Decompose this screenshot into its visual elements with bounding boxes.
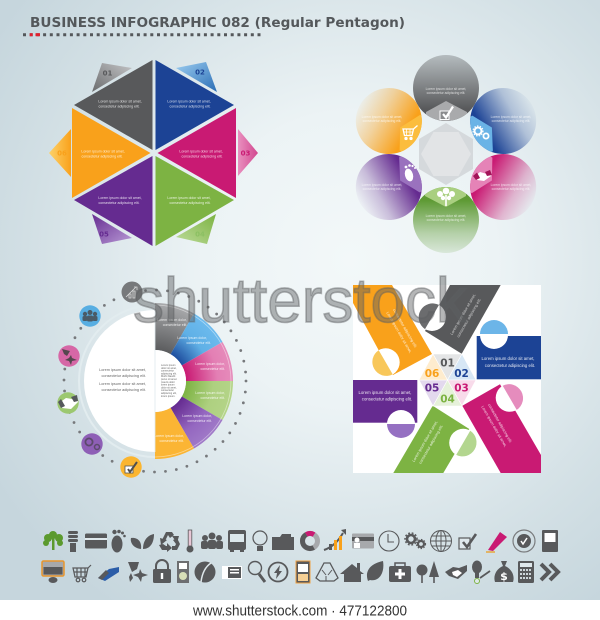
- triangle: green: [156, 156, 234, 246]
- triangle: magenta: consectetur adipiscing elit.: [181, 154, 223, 158]
- donut inner white: mauris dolor: [161, 381, 175, 384]
- segment: purple: Lorem ipsum dolor,: [182, 414, 212, 418]
- card: gray: [418, 285, 501, 354]
- dotted orbit: [64, 290, 246, 472]
- circle: green: [413, 181, 479, 253]
- card: green: consectetur adipiscing elit.: [418, 424, 444, 465]
- icon: magnifier: [248, 562, 265, 582]
- icon: growth chart: [324, 529, 346, 550]
- icon: road: [194, 562, 216, 582]
- tab 01: 01: [103, 70, 112, 78]
- circle captions: Lorem ipsum dolor sit amet,: [362, 183, 402, 187]
- card: green: [393, 406, 477, 473]
- icon: donut chart: [302, 533, 318, 548]
- triangle: green: consectetur adipiscing elit.: [169, 201, 211, 205]
- title: BUSINESS INFOGRAPHIC 082 (Regular Pentagon): [30, 16, 405, 31]
- icon: check badge: [120, 456, 142, 478]
- tab 05: [92, 214, 132, 244]
- circle captions: consectetur adipiscing elit.: [363, 187, 401, 191]
- icon: gears badge: [81, 433, 103, 455]
- icon: check box: [459, 534, 476, 549]
- circle captions: consectetur adipiscing elit.: [492, 187, 530, 191]
- donut inner white: [155, 310, 186, 452]
- left white half: consectetur adipiscing elit.: [101, 388, 146, 392]
- tab 02: [176, 62, 217, 92]
- panel: pinwheel on white square: [353, 285, 541, 473]
- segment: green: Lorem ipsum dolor,: [195, 391, 225, 395]
- donut inner white: purus sit amet: [161, 378, 177, 381]
- white square: [353, 285, 541, 473]
- center hexagons: [419, 123, 473, 185]
- icon: monitor: [42, 561, 64, 583]
- icon: clock: [379, 531, 399, 551]
- card: magenta: [462, 384, 541, 473]
- triangle: orange: Lorem ipsum dolor sit amet,: [81, 150, 125, 154]
- icon: money bag: [494, 561, 514, 583]
- segment: blue: consectetur elit.: [186, 341, 211, 345]
- segment: blue: Lorem ipsum dolor,: [177, 336, 207, 340]
- icon: trees: [416, 561, 439, 583]
- donut inner white: lorem ipsum: [161, 384, 175, 387]
- circle captions: [362, 87, 531, 222]
- segment: yellow: [154, 408, 194, 459]
- icon: cart: [73, 565, 91, 582]
- left halo ring: [79, 305, 231, 457]
- icon: badge: [513, 530, 535, 552]
- triangle: purple: [74, 156, 152, 246]
- footer text: www.shutterstock.com · 477122800: [192, 604, 407, 620]
- donut inner white: dolor sit amet,: [161, 386, 177, 389]
- segment: gray: Lorem ipsum dolor,: [157, 318, 187, 322]
- card: purple: [353, 380, 417, 438]
- card: purple: consectetur adipiscing elit.: [362, 396, 412, 402]
- icon: world map: [128, 562, 148, 582]
- icon: credit card: [85, 534, 107, 548]
- circle: gray: [413, 55, 479, 127]
- segment: purple: [170, 396, 222, 448]
- right thin highlight ring: [155, 305, 231, 457]
- triangle: orange: [72, 108, 150, 198]
- triangle: purple: consectetur adipiscing elit.: [98, 201, 140, 205]
- segment: magenta: [182, 342, 233, 381]
- donut inner white: adipiscing elit.: [161, 372, 177, 375]
- segment: green: [182, 381, 233, 420]
- donut inner white: Morbi blandit: [161, 375, 176, 378]
- icon: first aid: [389, 563, 411, 582]
- icon: marker: [486, 532, 507, 552]
- panel: six circles around a hexagon: [356, 55, 536, 253]
- watermark: shutterstock: [133, 266, 467, 336]
- left white half: consectetur adipiscing elit.: [101, 374, 146, 378]
- icon: people badge: [79, 305, 101, 327]
- icon: money bag: $: [500, 570, 508, 583]
- tab 02: 02: [195, 68, 205, 76]
- icon: leaves: [131, 534, 154, 549]
- icon: music player: [177, 561, 189, 583]
- icon: chart badge: [122, 282, 142, 302]
- circle captions: Lorem ipsum dolor sit amet,: [491, 115, 531, 119]
- segment: gray: consectetur elit.: [163, 323, 187, 327]
- donut inner white: Lorem ipsum: [161, 364, 175, 367]
- card: green: Lorem ipsum dolor sit amet,: [412, 420, 439, 463]
- icon: gears: [405, 533, 426, 548]
- icon: notebook: [542, 530, 558, 552]
- icon: recycle: [159, 532, 180, 552]
- panel: hexagon of triangles: [49, 60, 258, 246]
- triangle: gray: consectetur adipiscing elit.: [98, 104, 140, 108]
- icon: globe: [430, 530, 452, 552]
- tab 05: 05: [99, 230, 109, 238]
- circle captions: consectetur adipiscing elit.: [427, 218, 465, 222]
- circle captions: Lorem ipsum dolor sit amet,: [426, 87, 466, 91]
- center number hexagon: 04: [440, 394, 455, 406]
- tab 06: 06: [57, 150, 67, 158]
- icon: handshake: [473, 170, 492, 181]
- circle captions: consectetur adipiscing elit.: [492, 119, 530, 123]
- triangle: gray: [74, 60, 152, 150]
- center number hexagon: 01: [440, 358, 455, 370]
- segment: magenta: consectetur elit.: [200, 367, 225, 371]
- icon: cart: [403, 126, 418, 140]
- icon: light bulb: [253, 531, 267, 551]
- icon: handshake badge: [57, 392, 79, 414]
- icon: people: [201, 532, 223, 549]
- segment: blue: [170, 314, 222, 366]
- donut inner white: consectetur: [161, 389, 174, 392]
- card: blue: Lorem ipsum dolor sit amet,: [481, 356, 535, 361]
- icon: footprints: [403, 164, 416, 182]
- center number hexagon: 03: [454, 382, 469, 394]
- circle captions: Lorem ipsum dolor sit amet,: [491, 183, 531, 187]
- circle: blue: [470, 88, 536, 154]
- left white half: [84, 310, 155, 452]
- triangle: purple: Lorem ipsum dolor sit amet,: [98, 196, 142, 200]
- triangle: blue: Lorem ipsum dolor sit amet,: [167, 100, 211, 104]
- triangle: green: Lorem ipsum dolor sit amet,: [167, 196, 211, 200]
- donut inner white: lorem ipsum.: [161, 395, 176, 398]
- circle captions: consectetur adipiscing elit.: [363, 119, 401, 123]
- icon strip row 2: [42, 560, 558, 584]
- icon: bulb and key: [472, 560, 490, 584]
- circle: magenta: [470, 154, 536, 220]
- icon: tree: [43, 531, 63, 550]
- center number hexagon: 02: [454, 368, 469, 380]
- tab 04: 04: [195, 230, 205, 238]
- card: orange: [353, 285, 432, 376]
- icon: calculator: [518, 561, 534, 583]
- icon: power bolt: [268, 562, 288, 582]
- card: gray: consectetur adipiscing elit.: [456, 298, 482, 338]
- segment: yellow: Lorem ipsum dolor,: [154, 434, 184, 438]
- left white half: Lorem ipsum dolor sit amet,: [99, 382, 146, 386]
- triangle: orange: consectetur adipiscing elit.: [81, 154, 123, 158]
- icon: usb drive: [98, 567, 119, 581]
- card: orange: Lorem ipsum dolor sit amet,: [385, 311, 412, 354]
- segment: magenta: Lorem ipsum dolor,: [195, 362, 225, 366]
- tab 03: [238, 129, 258, 176]
- circle captions: consectetur adipiscing elit.: [427, 91, 465, 95]
- card: orange: consectetur adipiscing elit.: [392, 308, 418, 349]
- icon: check box: [440, 106, 453, 120]
- triangle: magenta: [158, 108, 236, 198]
- icon: gears: [473, 126, 489, 139]
- icon: house: [340, 563, 364, 582]
- center number hexagon: 05: [425, 382, 439, 394]
- center number hexagon: 06: [425, 368, 439, 380]
- tab 06: [49, 129, 71, 177]
- segment: green: consectetur elit.: [200, 396, 225, 400]
- segment: yellow: consectetur elit.: [159, 439, 184, 443]
- left white half: Lorem ipsum dolor sit amet,: [99, 368, 146, 372]
- tab 03: 03: [241, 150, 250, 158]
- icon: folder: [272, 534, 294, 550]
- icon: calendar panel: [222, 566, 242, 579]
- title dotted rule: [23, 33, 261, 36]
- triangle: magenta: Lorem ipsum dolor sit amet,: [179, 150, 223, 154]
- donut inner white: consectetur: [161, 370, 174, 373]
- icon: world badge: [58, 345, 80, 367]
- card: gray: Lorem ipsum dolor sit amet,: [450, 293, 477, 336]
- segment: purple: consectetur elit.: [187, 419, 212, 423]
- tab 01: [92, 63, 132, 92]
- icon: recycle outline: [316, 563, 338, 581]
- donut inner white: adipiscing elit,: [161, 392, 177, 395]
- icon: document: [296, 561, 310, 583]
- triangle: blue: consectetur adipiscing elit.: [169, 104, 211, 108]
- icon: tree: [437, 188, 455, 206]
- card: magenta: Lorem ipsum dolor sit amet,: [480, 405, 507, 448]
- circle: orange: [356, 88, 422, 154]
- icon: footprint: [112, 530, 126, 552]
- icon strip row 1: [43, 529, 558, 552]
- card: blue: [477, 320, 541, 379]
- icon: id card: [352, 534, 374, 548]
- icon: thermometer: [186, 530, 194, 552]
- footer strip: [0, 600, 600, 620]
- segment: gray: [155, 303, 194, 354]
- panel: half-donut with icon orbit: [57, 282, 246, 478]
- triangle: blue: [156, 60, 234, 150]
- center number hexagon: [419, 354, 476, 406]
- circle captions: Lorem ipsum dolor sit amet,: [426, 214, 466, 218]
- icon: cfl bulb: [68, 531, 78, 552]
- icon: padlock: [153, 560, 171, 583]
- icon: bus: [228, 530, 246, 552]
- donut inner white: dolor sit amet,: [161, 367, 177, 370]
- icon: leaf: [367, 561, 383, 581]
- tab 04: [176, 214, 216, 244]
- card: purple: Lorem ipsum dolor sit amet,: [358, 390, 412, 395]
- card: blue: consectetur adipiscing elit.: [485, 363, 535, 368]
- icon: chevrons: [541, 564, 558, 580]
- card: magenta: consectetur adipiscing elit.: [487, 403, 513, 444]
- circle: purple: [356, 154, 422, 220]
- icon: handshake: [445, 565, 467, 579]
- triangle: gray: Lorem ipsum dolor sit amet,: [98, 100, 142, 104]
- circle captions: Lorem ipsum dolor sit amet,: [362, 115, 402, 119]
